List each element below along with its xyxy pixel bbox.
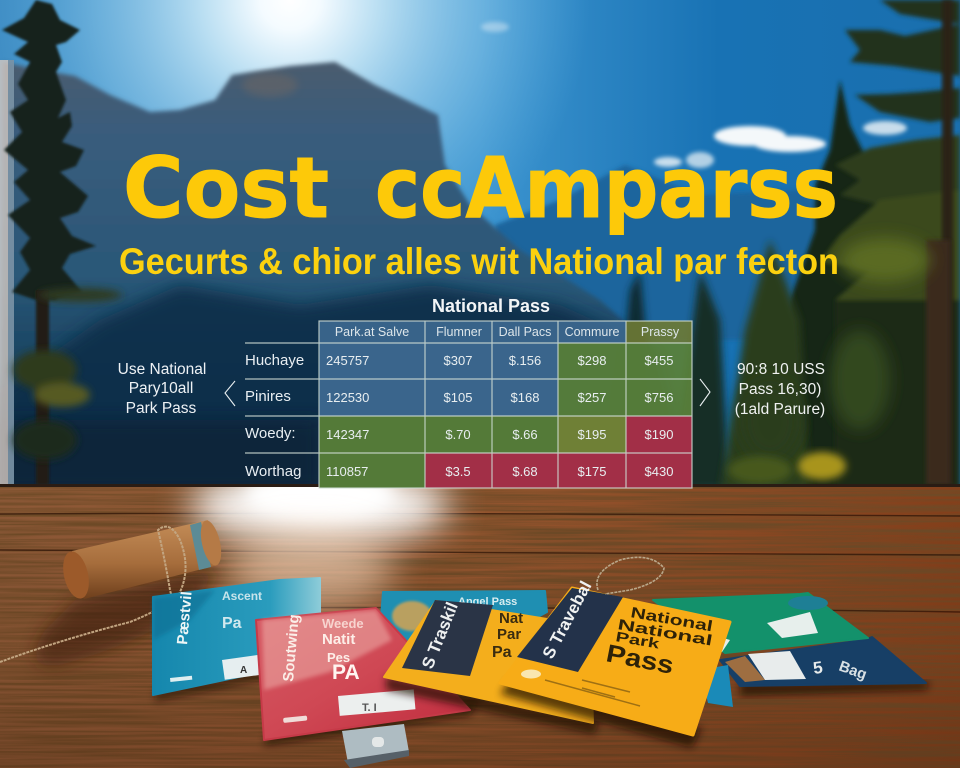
card: red pass: Soutwing [280,614,303,682]
left note [118,361,206,417]
comparison table: $.68 [512,464,538,479]
card: yellow pass front [500,557,730,748]
card: red pass: Pes [327,650,350,665]
table column headers: Dall Pacs [499,325,551,339]
upper branches [820,0,960,490]
comparison table: $3.5 [445,464,471,479]
card: red pass: PA [332,661,360,684]
table column headers: Flumner [436,325,482,339]
table values [326,353,369,479]
right note: 90:8 10 USS [737,361,825,378]
comparison table: $756 [645,390,673,405]
comparison table: $.156 [509,353,541,368]
title [123,139,838,237]
background: sky [0,0,960,490]
icon: wooden tube with string [0,519,225,662]
table row labels: Huchaye [245,352,304,369]
comparison table: $298 [578,353,606,368]
main rock face [0,62,690,490]
card: red pass [256,608,480,746]
card: red pass: Natit [322,631,355,648]
comparison table: $105 [444,390,472,405]
table values: 142347 [326,427,369,442]
card: navy pass right: 5 [812,658,824,678]
comparison table: $307 [444,353,472,368]
table values: 245757 [326,353,369,368]
right note: (1ald Parure) [735,401,825,418]
comparison table: $.70 [445,427,471,442]
card: blue pass behind: Angel Pass [458,596,517,608]
left note: Park Pass [126,400,197,417]
card: yellow pass middle: Pa [492,644,512,661]
arrow: left [225,381,235,406]
card text: Weede [322,616,364,631]
left note: Pary10all [129,380,193,397]
wood shadow of tube [35,570,215,666]
trees: right forest [610,0,960,490]
card: yellow pass front: National [629,604,714,635]
table grid [245,321,692,488]
foliage: left warm leaves [13,288,122,460]
subtitle: Gecurts & chior alles wit National par fecton [119,241,839,282]
right note: Pass 16,30) [739,381,821,398]
comparison table: $168 [511,390,539,405]
card: blue pass behind [376,591,547,682]
comparison table: $.66 [512,427,538,442]
card: green pass [653,593,868,653]
card: yellow pass front: Pass [604,639,676,680]
table row labels: Woedy: [245,425,296,442]
card: red pass: T. I [362,702,377,714]
comparison table: $195 [578,427,606,442]
table row labels: Worthag [245,463,301,480]
foliage: right olive and yellow [740,238,930,460]
comparison table: $257 [578,390,606,405]
table cell fills [319,321,692,488]
table column headers: Prassy [641,325,680,339]
comparison table: $190 [645,427,673,442]
arrow: right [700,379,710,406]
right note [735,361,825,418]
trees: left pine [2,0,96,485]
title: Cost [123,139,329,237]
distant ridge [495,165,860,340]
card: yellow pass front: National [616,616,714,650]
card text: Pæstvil [174,591,196,645]
comparison table: $455 [645,353,673,368]
background: mountain [0,62,860,490]
table values: 122530 [326,390,369,405]
left note: Use National [118,361,206,378]
table column headers: Commure [565,325,619,339]
table row labels [245,352,304,480]
window edge at left [0,60,14,485]
comparison table: $175 [578,464,606,479]
card text: S Traskil [418,600,462,671]
card: teal pass left: Ascent [222,589,262,603]
card: teal pass left: A [240,665,247,676]
comparison table: $430 [645,464,673,479]
card: yellow pass front: Park [614,628,661,652]
card text: S Travebal [539,578,595,662]
table column headers: Park.at Salve [335,325,409,339]
table values: 110857 [326,464,368,479]
card: yellow pass middle [384,600,600,734]
card: navy pass right: Bag [837,658,869,683]
card: navy pass right [720,637,930,696]
table row labels: Pinires [245,388,291,405]
lower dark slope [0,285,700,490]
card: teal pass left: Pa [222,615,242,632]
comparison table [245,321,692,488]
table heading: National Pass [432,296,550,316]
title: ccAmparss [375,139,838,237]
light glare on wood [190,465,450,608]
icon: metal clip [342,724,409,768]
clouds [481,22,907,168]
card: yellow pass middle: Par [497,626,521,643]
card: teal under right [700,665,733,707]
table top wood [0,465,960,768]
table column headers [335,325,680,339]
card: teal pass left [153,578,320,702]
card: yellow pass middle: Nat [499,610,523,627]
